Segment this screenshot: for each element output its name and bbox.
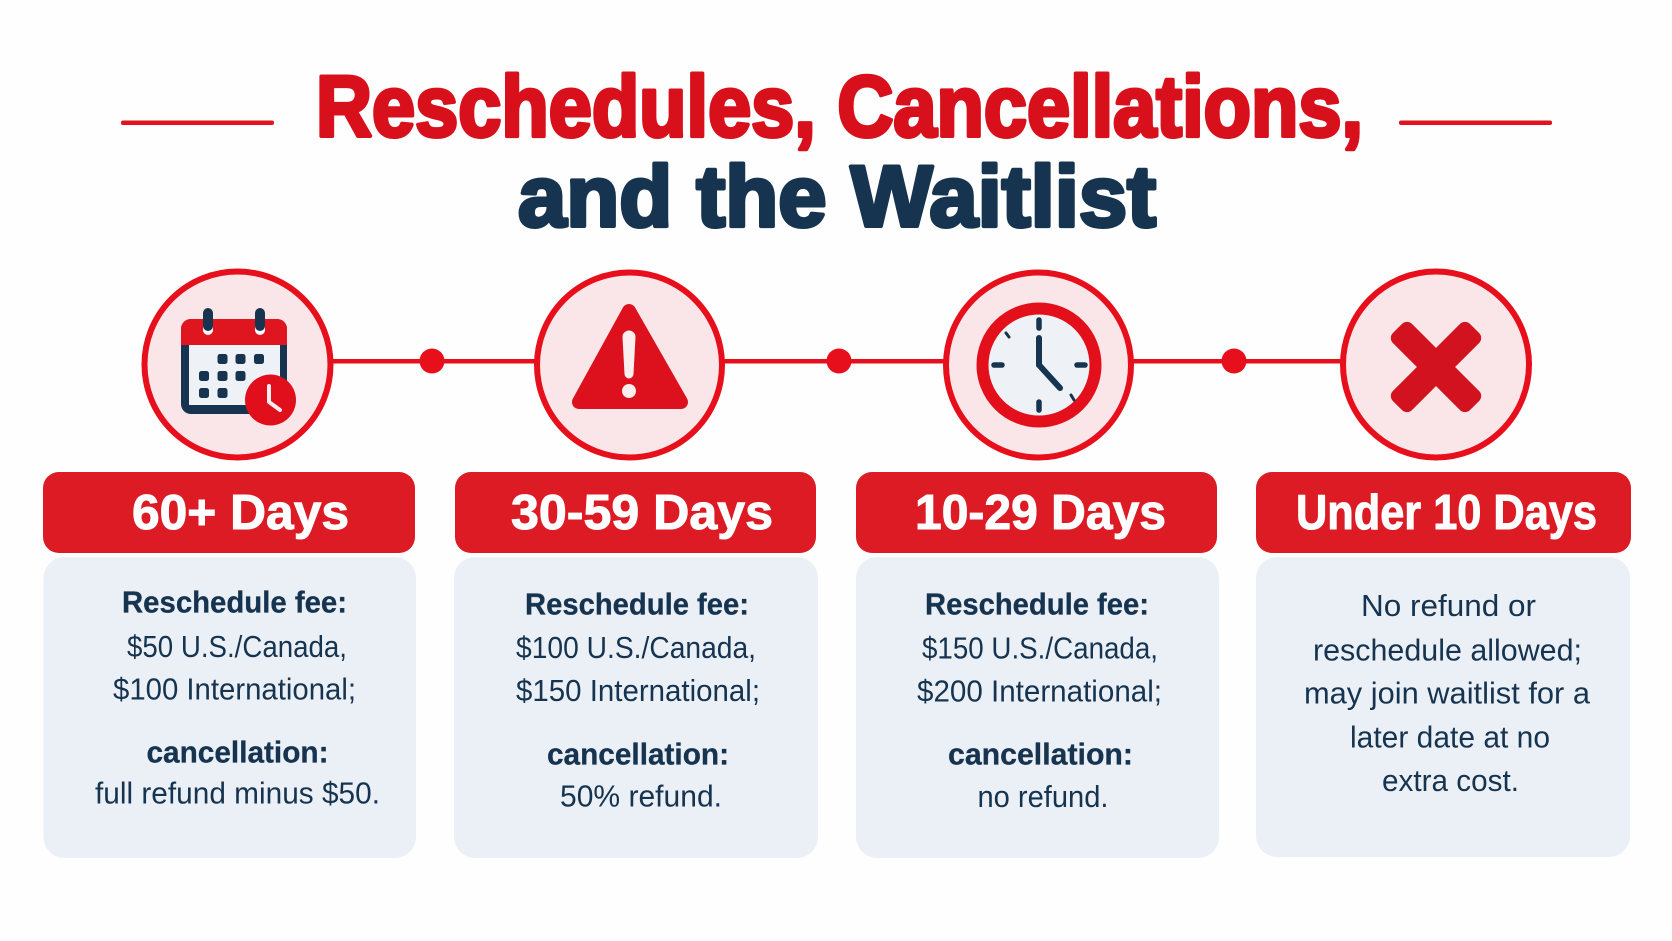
header: 30-59 Days: 30-59 Days	[511, 486, 773, 540]
panel: 60+ days details: full refund minus $50.	[95, 776, 380, 810]
title line 2: and the Waitlist	[518, 149, 1156, 245]
panel: 30-59 days details	[454, 557, 818, 858]
panel: 10-29 days details: cancellation:	[948, 736, 1133, 772]
header: Under 10 Days: Under 10 Days	[1296, 486, 1597, 540]
timeline dot 2	[826, 348, 852, 374]
header: 10-29 Days: 10-29 Days	[915, 486, 1166, 540]
panel: 10-29 days details	[856, 557, 1219, 858]
header: 30-59 Days	[455, 472, 816, 553]
panel: 30-59 days details: Reschedule fee:	[525, 586, 749, 622]
timeline connector	[330, 348, 1345, 374]
icon: clock	[946, 272, 1131, 458]
panel: under 10 days details: later date at no	[1350, 720, 1550, 754]
column: 60+ days	[43, 472, 416, 858]
header: Under 10 Days	[1256, 472, 1631, 553]
panel: 10-29 days details: no refund.	[978, 779, 1108, 814]
column: under 10 days	[1256, 472, 1631, 857]
title	[316, 59, 1363, 245]
icon: calendar with clock	[144, 272, 330, 458]
panel: under 10 days details: extra cost.	[1382, 763, 1519, 798]
title line 1: Reschedules, Cancellations,	[316, 59, 1363, 155]
panel: 30-59 days details: $150 International;	[516, 673, 760, 708]
header: 60+ Days	[43, 472, 415, 553]
header: 60+ Days: 60+ Days	[132, 486, 349, 540]
panel: 10-29 days details: Reschedule fee:	[925, 586, 1149, 622]
panel: under 10 days details: may join waitlist for a	[1304, 676, 1591, 710]
panel: 60+ days details	[44, 557, 416, 858]
icon: red X	[1343, 272, 1529, 458]
panel: 60+ days details: $100 International;	[113, 672, 356, 706]
panel: 60+ days details: $50 U.S./Canada,	[127, 629, 347, 664]
timeline dot 3	[1222, 348, 1246, 374]
panel: under 10 days details: reschedule allowed;	[1313, 632, 1582, 668]
panel: under 10 days details: No refund or	[1361, 588, 1536, 623]
header: 10-29 Days	[856, 472, 1217, 553]
panel: 30-59 days details: 50% refund.	[560, 778, 722, 814]
panel: 10-29 days details: $150 U.S./Canada,	[922, 630, 1158, 666]
column: 30-59 days	[454, 472, 818, 858]
timeline dot 1	[420, 348, 444, 374]
column: 10-29 days	[856, 472, 1219, 858]
panel: 60+ days details: Reschedule fee:	[122, 584, 347, 620]
panel: 60+ days details: cancellation:	[146, 734, 328, 770]
panel: 30-59 days details: cancellation:	[547, 736, 729, 772]
panel: under 10 days details	[1256, 557, 1630, 857]
icon: warning triangle	[537, 272, 722, 458]
panel: 10-29 days details: $200 International;	[917, 674, 1162, 708]
panel: 30-59 days details: $100 U.S./Canada,	[516, 630, 756, 665]
